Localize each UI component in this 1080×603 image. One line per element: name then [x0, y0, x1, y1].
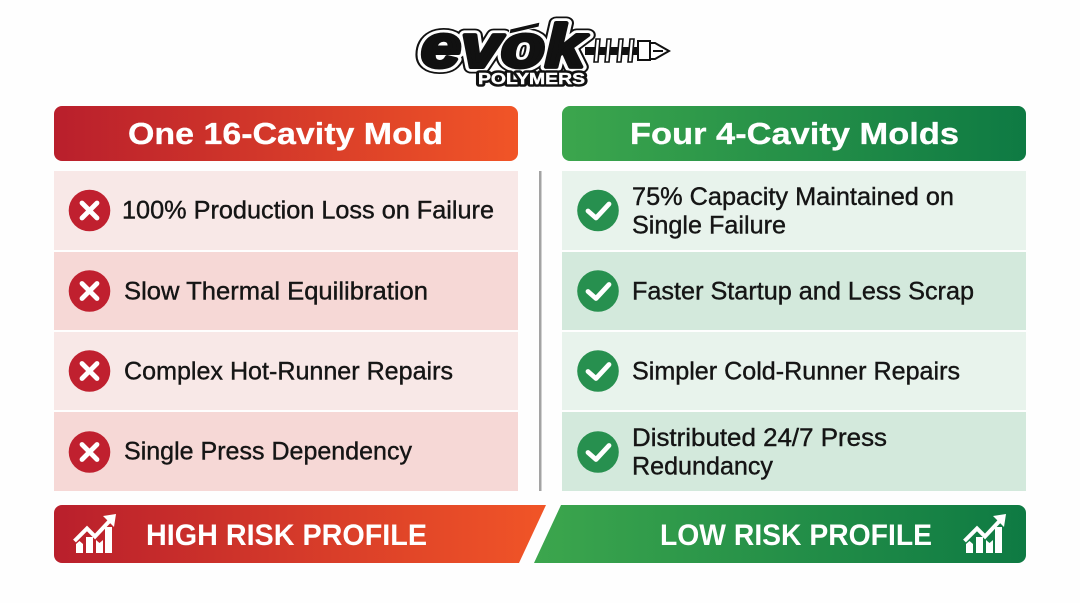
logo wordmark: evok: [421, 13, 588, 80]
row: press redundancy: [562, 412, 1026, 491]
row: single press dependency: [54, 412, 518, 491]
row: production loss: [54, 171, 518, 250]
panel: four 4-cavity molds: [562, 106, 1026, 491]
banner: low risk profile: [534, 505, 1026, 563]
banner: high risk profile: [54, 505, 546, 563]
logo wordmark: evok: [421, 13, 588, 80]
logo screw: [585, 39, 669, 62]
heading: four 4-cavity molds: Four 4-Cavity Molds: [630, 116, 959, 151]
label: low risk profile: LOW RISK PROFILE: [660, 519, 932, 552]
logo: Evok Polymers: [421, 13, 669, 88]
heading: four 4-cavity molds: [562, 106, 1026, 161]
row: single press dependency: Single Press Dependency: [124, 438, 412, 466]
row: thermal equilibration: Slow Thermal Equilibration: [124, 278, 428, 306]
label: high risk profile: HIGH RISK PROFILE: [146, 519, 427, 552]
logo wordmark: evok: [421, 13, 588, 80]
row: faster startup: Faster Startup and Less Scrap: [632, 278, 974, 306]
row: production loss: 100% Production Loss on Failure: [122, 196, 494, 224]
row: press redundancy: Distributed 24/7 Press: [632, 424, 887, 452]
row: hot-runner repairs: Complex Hot-Runner Repairs: [124, 358, 453, 386]
row: faster startup: [562, 252, 1026, 330]
row: cold-runner repairs: Simpler Cold-Runner Repairs: [632, 358, 960, 386]
row: capacity maintained: [562, 171, 1026, 250]
logo subtitle: POLYMERS: [478, 71, 585, 88]
panel: one 16-cavity mold: [54, 106, 518, 491]
row: capacity maintained: 75% Capacity Maintained on: [632, 183, 954, 211]
center divider: [539, 171, 542, 491]
row: hot-runner repairs: [54, 332, 518, 410]
row: press redundancy: Redundancy: [632, 452, 773, 480]
heading: one 16-cavity mold: One 16-Cavity Mold: [128, 116, 443, 151]
logo subtitle: POLYMERS: [478, 71, 585, 88]
row: cold-runner repairs: [562, 332, 1026, 410]
row: thermal equilibration: [54, 252, 518, 330]
icon: rising chart: [74, 514, 116, 553]
row: capacity maintained: Single Failure: [632, 212, 786, 240]
heading: one 16-cavity mold: [54, 106, 518, 161]
icon: rising chart: [964, 514, 1006, 553]
